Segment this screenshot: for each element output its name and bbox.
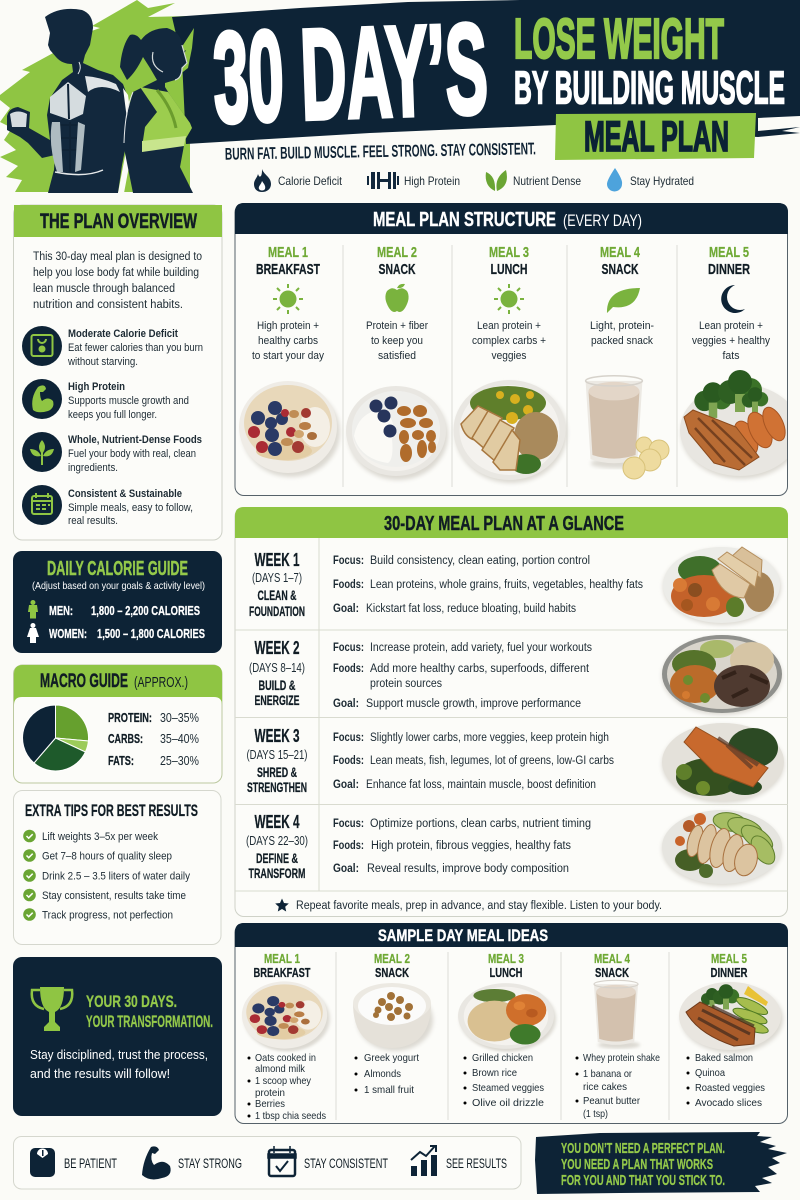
meal 3 column: MEAL 3	[489, 244, 529, 261]
week 2 label	[249, 638, 305, 708]
item: whole foods: ingredients.	[68, 462, 118, 474]
reminder: stay consistent: STAY CONSISTENT	[304, 1156, 388, 1171]
sample meal 5	[679, 951, 783, 1109]
list: meal 4 foods: Peanut butter	[583, 1095, 640, 1107]
food: oatmeal bowl	[239, 381, 340, 477]
benefit: stay hydrated: Stay Hydrated	[630, 174, 694, 188]
week 3 label: STRENGTHEN	[247, 780, 307, 795]
icon: star	[275, 898, 289, 912]
structure heading	[235, 203, 788, 234]
icon: leaf	[607, 288, 640, 313]
week 2 row	[249, 635, 782, 715]
meal 3 column: LUNCH	[490, 261, 528, 278]
calorie heading: DAILY CALORIE GUIDE	[47, 558, 188, 580]
food: beef and rice bowl	[662, 635, 782, 715]
week 2 label: (DAYS 8–14)	[249, 660, 305, 675]
week 2 details: Add more healthy carbs, superfoods, different	[370, 663, 590, 675]
item: high protein: High Protein	[68, 381, 125, 393]
callout text: and the results will follow!	[30, 1066, 170, 1081]
week 2 label: BUILD &	[258, 678, 296, 693]
tips checklist: Stay consistent, results take time	[42, 890, 186, 902]
sample meal 3	[458, 951, 556, 1109]
list: meal 5 foods: Avocado slices	[695, 1097, 762, 1109]
food: shake	[594, 980, 640, 1049]
food: yogurt bowl	[353, 983, 433, 1051]
meal 4 column: Light, protein-	[590, 320, 654, 332]
benefit: high protein: High Protein	[404, 174, 460, 188]
panel: 30-day plan at a glance	[235, 507, 788, 916]
meal 4 column: MEAL 4	[600, 244, 640, 261]
icon: trophy	[32, 987, 72, 1031]
icon: sun	[273, 284, 303, 314]
meal 2 column: Protein + fiber	[366, 320, 428, 332]
macro heading: MACRO GUIDE	[40, 671, 128, 692]
men calories	[49, 603, 200, 618]
week 3 details: Foods:	[333, 755, 364, 767]
women calories: 1,500 – 1,800 CALORIES	[97, 626, 205, 641]
week 2 details	[333, 642, 592, 710]
panel: bottom reminders	[14, 1136, 521, 1189]
icon: sprout	[22, 432, 62, 472]
icon: moon	[721, 285, 745, 313]
item: moderate calorie deficit	[67, 328, 203, 368]
week 1 label: WEEK 1	[254, 550, 300, 570]
icon: apple	[385, 284, 409, 312]
macro values: PROTEIN:	[108, 710, 152, 725]
sample meal 5: MEAL 5	[711, 951, 747, 966]
panel: daily calorie guide	[13, 551, 222, 653]
item: high protein: Supports muscle growth and	[68, 395, 189, 407]
list: meal 3 foods	[464, 1052, 544, 1109]
week 2 details: protein sources	[370, 678, 442, 690]
meal 2 column: SNACK	[378, 261, 416, 278]
list: meal 4 foods: Whey protein shake	[583, 1052, 660, 1064]
week 4 details	[333, 818, 591, 875]
icon: calendar	[22, 485, 62, 525]
week 3 details	[333, 732, 614, 791]
week 3 details: Slightly lower carbs, more veggies, keep protein high	[370, 732, 609, 744]
week 4 details: Reveal results, improve body composition	[367, 863, 569, 875]
week 2 label: ENERGIZE	[254, 693, 300, 708]
reminder: be patient: BE PATIENT	[64, 1156, 117, 1171]
week 4 details: High protein, fibrous veggies, healthy fats	[371, 840, 571, 852]
food: salmon plate	[680, 370, 800, 479]
list: meal 3 foods: Grilled chicken	[472, 1052, 533, 1064]
women calories	[49, 626, 205, 641]
reminder: stay consistent	[268, 1146, 388, 1176]
week 4 label: TRANSFORM	[248, 866, 306, 881]
week 3 row	[246, 723, 784, 803]
week 1 label: CLEAN &	[258, 588, 297, 603]
overview intro text: nutrition and consistent habits.	[33, 299, 183, 311]
week 1 label	[249, 550, 305, 619]
week 3 details: Enhance fat loss, maintain muscle, boost definition	[366, 779, 596, 791]
overview heading: THE PLAN OVERVIEW	[40, 210, 197, 233]
tips checklist: Track progress, not perfection	[42, 910, 173, 922]
list: meal 2 foods: 1 small fruit	[364, 1084, 414, 1096]
meal 1 column: healthy carbs	[258, 335, 318, 347]
meal 1 column: to start your day	[252, 350, 324, 362]
week 2 details: Increase protein, add variety, fuel your workouts	[370, 642, 592, 654]
list: meal 2 foods: Greek yogurt	[364, 1052, 419, 1064]
meal 1 column: MEAL 1	[268, 244, 308, 261]
tips checklist	[23, 830, 190, 922]
icon: calorie scale	[22, 326, 62, 366]
week 4 details: Foods:	[333, 840, 364, 852]
figure: woman silhouette	[120, 28, 193, 193]
meal 2 column	[346, 244, 448, 480]
meal 3 column: complex carbs +	[472, 335, 546, 347]
benefit: nutrient dense	[486, 170, 581, 191]
meal 5 column: fats	[722, 350, 740, 362]
benefit: calorie deficit	[254, 169, 343, 192]
food: salmon avocado plate	[679, 982, 783, 1053]
overview intro text: lean muscle through balanced	[33, 283, 175, 295]
item: moderate calorie deficit: without starving.	[67, 356, 138, 368]
week 3 label: (DAYS 15–21)	[246, 747, 308, 762]
icon: sun	[494, 284, 524, 314]
week 3 label: WEEK 3	[254, 726, 300, 746]
panel: meal plan structure	[235, 203, 800, 496]
benefit: nutrient dense: Nutrient Dense	[513, 174, 581, 188]
week 4 label: DEFINE &	[256, 851, 298, 866]
week 4 label: (DAYS 22–30)	[246, 833, 308, 848]
meal 5 column: veggies + healthy	[692, 335, 770, 347]
list: meal 3 foods: Steamed veggies	[472, 1082, 544, 1094]
panel: extra tips	[14, 790, 221, 944]
week 1 details: Focus:	[333, 555, 364, 567]
list: meal 4 foods	[576, 1052, 660, 1120]
reminder: stay strong: STAY STRONG	[178, 1156, 242, 1171]
meal 5 column: MEAL 5	[709, 244, 749, 261]
meal 4 column: packed snack	[591, 335, 653, 347]
sample heading: SAMPLE DAY MEAL IDEAS	[378, 926, 548, 945]
item: consistent: Simple meals, easy to follow,	[68, 502, 193, 514]
figure: man silhouette	[7, 9, 134, 193]
week 4 row	[246, 810, 782, 886]
men calories: MEN:	[49, 603, 73, 618]
panel: transformation callout	[13, 957, 222, 1116]
meal 1 column	[239, 244, 340, 477]
green brush splash	[0, 0, 190, 192]
overview heading	[14, 205, 222, 237]
navy brush banner	[172, 0, 800, 144]
week 1 details	[333, 555, 643, 615]
food: salmon and greens plate	[662, 723, 784, 803]
macro pie chart	[23, 705, 89, 771]
callout text	[30, 1047, 208, 1081]
callout: brush quote: YOU NEED A PLAN THAT WORKS	[561, 1156, 713, 1173]
callout heading: YOUR 30 DAYS.	[86, 992, 177, 1011]
week 3 label	[246, 726, 308, 795]
sample meal 4: SNACK	[595, 965, 629, 980]
week 1 details: Lean proteins, whole grains, fruits, vegetables, healthy fats	[370, 579, 643, 591]
week 4 details: Optimize portions, clean carbs, nutrient timing	[370, 818, 591, 830]
sample meal 1: MEAL 1	[264, 951, 300, 966]
meal 4 column	[586, 244, 669, 479]
callout: brush quote	[535, 1132, 787, 1194]
women calories: WOMEN:	[49, 626, 87, 641]
sample heading	[235, 923, 788, 947]
sample meal 1	[242, 951, 330, 1122]
sample meal 4: MEAL 4	[594, 951, 631, 966]
sample meal 3: LUNCH	[490, 965, 522, 980]
tips heading: EXTRA TIPS FOR BEST RESULTS	[25, 802, 198, 820]
item: consistent	[68, 488, 193, 527]
sample meal 4	[576, 951, 660, 1120]
food: oatmeal	[242, 981, 330, 1052]
list: meal 1 foods: almond milk	[255, 1063, 306, 1075]
callout heading: YOUR TRANSFORMATION.	[86, 1012, 213, 1031]
macro heading	[14, 665, 222, 705]
item: whole foods: Whole, Nutrient-Dense Foods	[68, 434, 202, 446]
icon: flexed arm	[22, 379, 62, 419]
item: moderate calorie deficit: Moderate Calorie Deficit	[68, 328, 178, 340]
week 1 details: Build consistency, clean eating, portion control	[370, 555, 590, 567]
meal 3 column: Lean protein +	[477, 320, 541, 332]
benefit: high protein	[367, 172, 460, 189]
overview intro text: help you lose body fat while building	[33, 267, 199, 279]
header banner	[0, 0, 800, 193]
item: whole foods	[68, 434, 202, 474]
reminder: stay strong	[142, 1146, 242, 1179]
list: meal 5 foods: Quinoa	[695, 1067, 725, 1079]
list: meal 1 foods: protein	[255, 1087, 285, 1099]
sample meal 2	[353, 951, 433, 1096]
meal 4 column: SNACK	[602, 261, 639, 278]
meal 1 column: High protein +	[257, 320, 319, 332]
meal 3 column	[454, 244, 567, 483]
list: meal 3 foods: Brown rice	[472, 1067, 517, 1079]
list: meal 1 foods	[248, 1052, 326, 1122]
meal 2 column: MEAL 2	[377, 244, 417, 261]
overview intro text	[33, 251, 202, 311]
week 2 details: Focus:	[333, 642, 364, 654]
week 1 label: FOUNDATION	[249, 604, 305, 619]
item: consistent: real results.	[68, 515, 118, 527]
list: meal 5 foods: Roasted veggies	[695, 1082, 765, 1094]
food: chicken and avocado plate	[662, 810, 782, 886]
panel: sample day meal ideas	[235, 923, 788, 1124]
sample meal 5: DINNER	[710, 965, 748, 980]
tagline: BURN FAT. BUILD MUSCLE. FEEL STRONG. STAY CONSISTENT.	[225, 139, 536, 164]
macro values: 25–30%	[160, 753, 199, 768]
food: chicken rice plate	[458, 983, 556, 1052]
meal 5 column	[680, 246, 787, 480]
week 1 details: Goal:	[333, 603, 359, 615]
reminder: see results	[411, 1146, 507, 1176]
macro heading: (APPROX.)	[134, 674, 188, 691]
week 3 details: Goal:	[333, 779, 359, 791]
panel: plan overview	[14, 205, 222, 540]
icon: woman	[27, 623, 39, 643]
sample meal 1: BREAKFAST	[254, 965, 311, 980]
reminder: see results: SEE RESULTS	[446, 1156, 507, 1171]
list: meal 3 foods: Olive oil drizzle	[472, 1097, 544, 1109]
week 2 details: Support muscle growth, improve performance	[366, 698, 581, 710]
sample meal 2: MEAL 2	[374, 951, 410, 966]
glance footer note: Repeat favorite meals, prep in advance, and stay flexible. Listen to your body.	[296, 900, 662, 912]
item: high protein	[68, 381, 189, 421]
item: moderate calorie deficit: Eat fewer calories than you burn	[68, 342, 203, 354]
list: meal 4 foods: 1 banana or	[583, 1068, 632, 1080]
week 1 details: Foods:	[333, 579, 364, 591]
meal 2 column: satisfied	[378, 350, 416, 362]
men calories: 1,800 – 2,200 CALORIES	[91, 603, 200, 618]
meal 5 column: Lean protein +	[699, 320, 763, 332]
week 3 label: SHRED &	[257, 765, 297, 780]
glance heading	[235, 507, 788, 538]
week 3 details: Lean meats, fish, legumes, lot of greens, low-GI carbs	[370, 755, 614, 767]
overview intro text: This 30-day meal plan is designed to	[33, 251, 202, 263]
list: meal 1 foods: Oats cooked in	[255, 1052, 316, 1064]
macro values: FATS:	[108, 753, 134, 768]
list: meal 5 foods	[686, 1052, 765, 1109]
meal 2 column: to keep you	[371, 335, 423, 347]
food: chicken and veg plate	[663, 547, 781, 625]
list: meal 5 foods: Baked salmon	[695, 1052, 753, 1064]
macro values	[108, 710, 199, 768]
benefit: calorie deficit: Calorie Deficit	[278, 174, 343, 188]
macro values: CARBS:	[108, 731, 143, 746]
item: high protein: keeps you full longer.	[68, 409, 157, 421]
food: cottage cheese bowl	[346, 386, 448, 480]
macro values: 30–35%	[160, 710, 199, 725]
calorie subheading: (Adjust based on your goals & activity level)	[32, 580, 205, 592]
food: protein shake	[586, 376, 669, 479]
panel: macro guide	[14, 665, 222, 783]
glance heading: 30-DAY MEAL PLAN AT A GLANCE	[384, 513, 624, 535]
benefit: stay hydrated	[607, 168, 694, 192]
week 4 details: Goal:	[333, 863, 359, 875]
meal 3 column: veggies	[492, 350, 527, 362]
list: meal 1 foods: Berries	[255, 1098, 285, 1110]
icon: man	[28, 600, 38, 618]
food: chicken plate	[454, 380, 567, 483]
week 4 label	[246, 812, 308, 881]
week 2 details: Goal:	[333, 698, 359, 710]
list: meal 1 foods: 1 scoop whey	[255, 1075, 312, 1087]
list: meal 2 foods: Almonds	[364, 1068, 401, 1080]
list: meal 4 foods: rice cakes	[583, 1081, 627, 1093]
list: meal 2 foods	[354, 1052, 419, 1096]
sample meal 3: MEAL 3	[488, 951, 524, 966]
sample meal 2: SNACK	[375, 965, 409, 980]
tips checklist: Drink 2.5 – 3.5 liters of water daily	[42, 870, 190, 882]
macro values: 35–40%	[160, 731, 199, 746]
man highlights	[50, 82, 86, 120]
week 4 details: Focus:	[333, 818, 364, 830]
reminder: be patient	[30, 1148, 117, 1177]
list: meal 4 foods: (1 tsp)	[583, 1108, 608, 1120]
week 3 details: Focus:	[333, 732, 364, 744]
item: consistent: Consistent & Sustainable	[68, 488, 182, 500]
week 1 row	[249, 547, 781, 625]
week 1 details: Kickstart fat loss, reduce bloating, build habits	[366, 603, 576, 615]
meal 1 column: BREAKFAST	[256, 261, 320, 278]
week 2 label: WEEK 2	[254, 638, 300, 658]
structure heading: MEAL PLAN STRUCTURE	[373, 209, 556, 231]
item: whole foods: Fuel your body with real, clean	[68, 448, 196, 460]
list: meal 1 foods: 1 tbsp chia seeds	[255, 1110, 326, 1122]
callout heading	[86, 992, 213, 1031]
tips checklist: Lift weights 3–5x per week	[42, 831, 158, 843]
week 4 label: WEEK 4	[254, 812, 300, 832]
structure heading: (EVERY DAY)	[563, 211, 642, 230]
week 1 label: (DAYS 1–7)	[252, 570, 302, 585]
week 2 details: Foods:	[333, 663, 364, 675]
meal 5 column: DINNER	[708, 261, 750, 278]
callout text: Stay disciplined, trust the process,	[30, 1047, 208, 1062]
tips checklist: Get 7–8 hours of quality sleep	[42, 850, 172, 862]
